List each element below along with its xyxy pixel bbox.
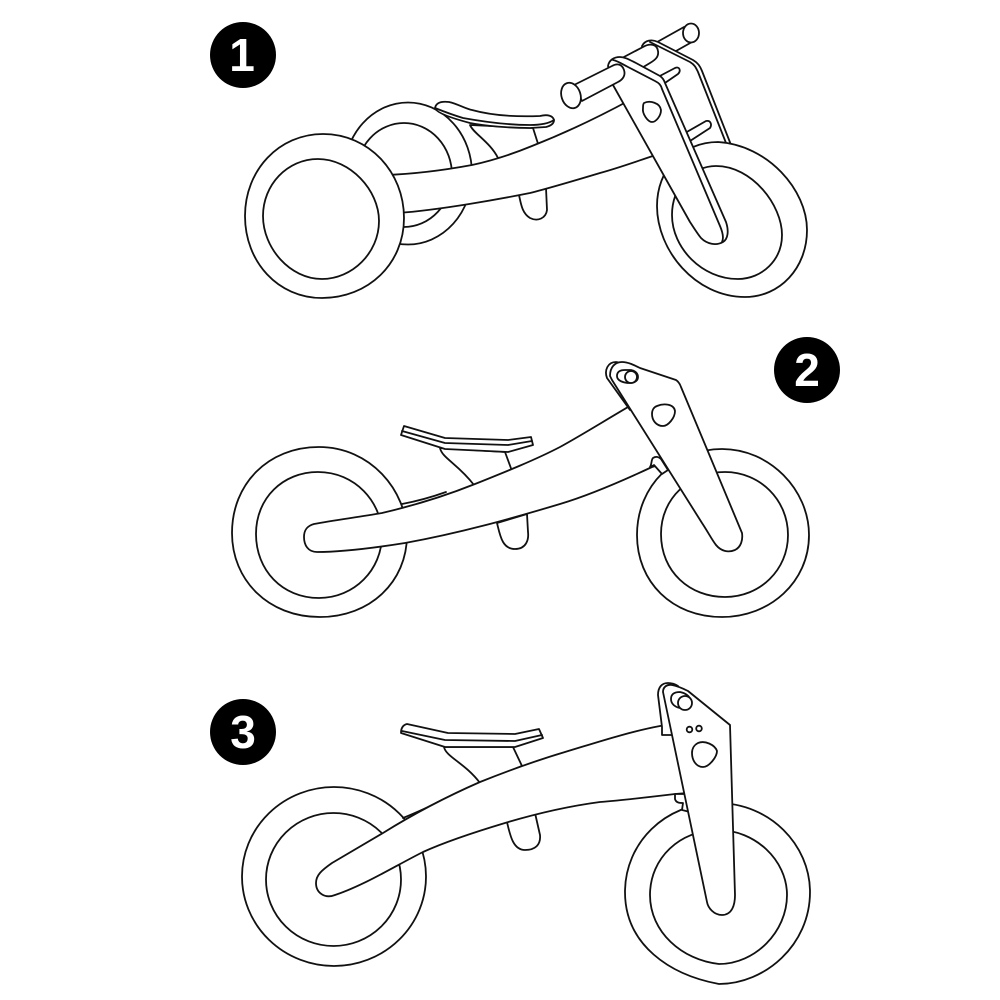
- saddle: [435, 102, 554, 128]
- front wheel: [625, 803, 810, 984]
- pin: [617, 370, 638, 383]
- fork plate: [610, 362, 742, 551]
- fork plate: [663, 685, 735, 915]
- rear fork plate: [642, 40, 733, 155]
- seat support: [403, 747, 522, 818]
- seat support: [402, 448, 512, 504]
- frame: [316, 722, 700, 896]
- badge: number 1: [210, 22, 276, 88]
- handlebar far section: [650, 24, 699, 60]
- front wheel: [657, 142, 807, 297]
- saddle: [401, 426, 533, 452]
- handlebar grip: [558, 64, 625, 111]
- front wheel: [637, 449, 809, 617]
- badge: number 1: 1: [229, 29, 255, 81]
- far rear wheel: [344, 102, 472, 244]
- fork hole: [643, 102, 661, 122]
- rear fork plate: [658, 683, 680, 735]
- handlebar middle section: [622, 45, 658, 72]
- saddle support: [470, 125, 540, 158]
- footrest: [507, 813, 540, 850]
- rear fork plate: [606, 362, 630, 410]
- saddle: [401, 724, 543, 747]
- fork pegs: [656, 68, 711, 141]
- rear wheel: [232, 447, 407, 617]
- frame: [385, 100, 665, 213]
- pin: [671, 692, 692, 710]
- footrest: [497, 514, 528, 549]
- front fork plate: [608, 57, 728, 244]
- small holes: [687, 726, 702, 732]
- fork hole: [692, 742, 717, 767]
- rear wheel: [242, 787, 426, 966]
- illustration: three-wheel trike configuration: [245, 24, 807, 298]
- badge: number 3: [210, 699, 276, 765]
- lower frame bracket: [675, 794, 695, 812]
- footrest: [519, 188, 547, 220]
- illustration: low balance bike configuration: [232, 362, 809, 617]
- badge: number 3: 3: [230, 706, 256, 758]
- illustration: high balance bike configuration: [242, 683, 810, 984]
- frame bracket: [650, 457, 668, 474]
- near rear wheel: [245, 134, 404, 298]
- fork hole: [652, 404, 675, 426]
- frame: [304, 400, 670, 552]
- badge: number 2: 2: [794, 344, 820, 396]
- badge: number 2: [774, 337, 840, 403]
